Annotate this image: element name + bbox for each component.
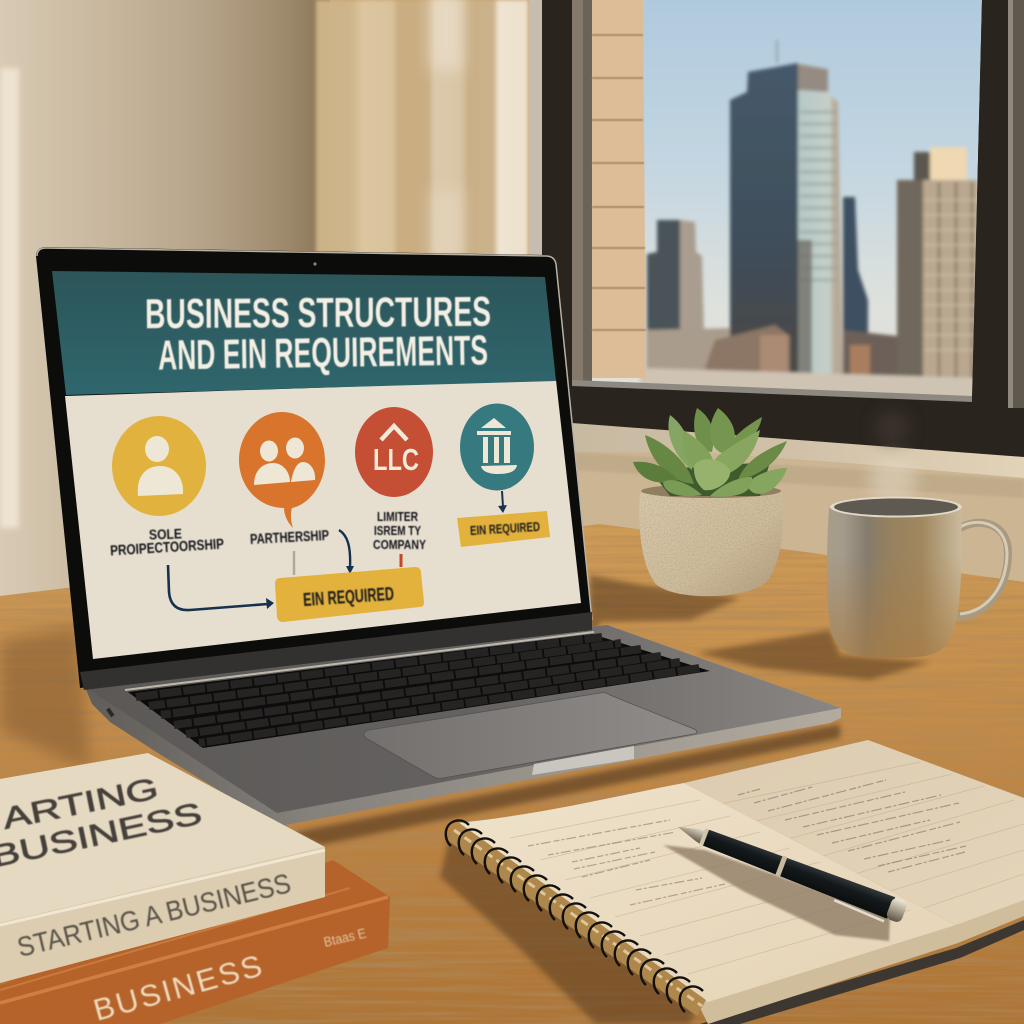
label: sole proprietorship — [110, 525, 225, 559]
EIN required main badge: EIN REQUIRED — [302, 584, 395, 610]
label: limited liability company — [373, 509, 426, 552]
window frame and city view — [542, 0, 1024, 470]
trackpad — [364, 693, 697, 778]
pen shadow — [663, 845, 890, 941]
cream book: ARTING — [0, 772, 161, 836]
label: partnership: PARTHERSHIP — [250, 528, 330, 548]
right page — [684, 740, 1024, 925]
slide on screen — [52, 271, 581, 659]
sky — [572, 0, 982, 398]
pen — [673, 816, 908, 927]
tower — [730, 63, 798, 378]
icon: sole proprietorship person — [112, 416, 206, 516]
EIN required main badge — [275, 567, 424, 622]
handle — [957, 523, 1008, 617]
narrow dark building — [843, 197, 868, 335]
EIN required small badge: EIN REQUIRED — [470, 520, 540, 538]
window ledge — [556, 423, 1024, 610]
title — [145, 288, 491, 379]
arrow: partnership to EIN — [339, 530, 354, 574]
laptop base — [85, 625, 841, 826]
icon: LLC: LLC — [373, 442, 419, 477]
steam — [869, 410, 917, 502]
spiral binding — [446, 820, 706, 1016]
title: BUSINESS STRUCTURES — [145, 288, 491, 337]
connector ticks — [294, 551, 401, 575]
orange book — [0, 860, 390, 1024]
arrow: sole proprietorship to EIN — [168, 565, 274, 610]
icon: corporation building — [460, 404, 534, 490]
label: limited liability company: ISREM TY — [374, 523, 421, 538]
front notch — [532, 746, 634, 775]
wall — [0, 0, 330, 610]
laptop lid — [36, 247, 592, 690]
label: limited liability company: COMPANY — [373, 537, 426, 552]
far left building — [647, 220, 680, 330]
icon: LLC — [355, 407, 433, 497]
mug body — [827, 508, 962, 658]
laptop — [36, 247, 841, 826]
skyline — [640, 40, 980, 402]
window sash — [572, 380, 972, 402]
keyboard — [125, 632, 710, 748]
brick column — [592, 0, 646, 378]
cream book — [0, 753, 325, 983]
wooden table — [0, 524, 1024, 1024]
label: limited liability company: LIMITER — [377, 509, 418, 524]
arrow: corporation to EIN — [498, 491, 507, 513]
right building — [914, 152, 930, 182]
EIN required small badge — [457, 511, 550, 547]
label: sole proprietorship: PROIPECTOORSHIP — [110, 537, 225, 559]
orange book: Btaas E — [322, 926, 368, 950]
title: AND EIN REQUIREMENTS — [158, 326, 488, 379]
slide header — [52, 271, 556, 395]
icon: partnership people — [239, 412, 325, 528]
leaves — [633, 408, 787, 497]
left page — [457, 783, 956, 1002]
notebook — [440, 740, 1024, 1024]
cover and page block — [700, 920, 1024, 1024]
label: sole proprietorship: SOLE — [149, 525, 182, 543]
pot — [639, 486, 783, 596]
succulent plant in pot — [633, 408, 787, 596]
stacked books — [0, 753, 390, 1024]
coffee mug — [827, 496, 1008, 658]
cream book: STARTING A BUSINESS — [14, 867, 294, 963]
curtain — [316, 0, 543, 300]
low rooftops — [646, 326, 732, 372]
